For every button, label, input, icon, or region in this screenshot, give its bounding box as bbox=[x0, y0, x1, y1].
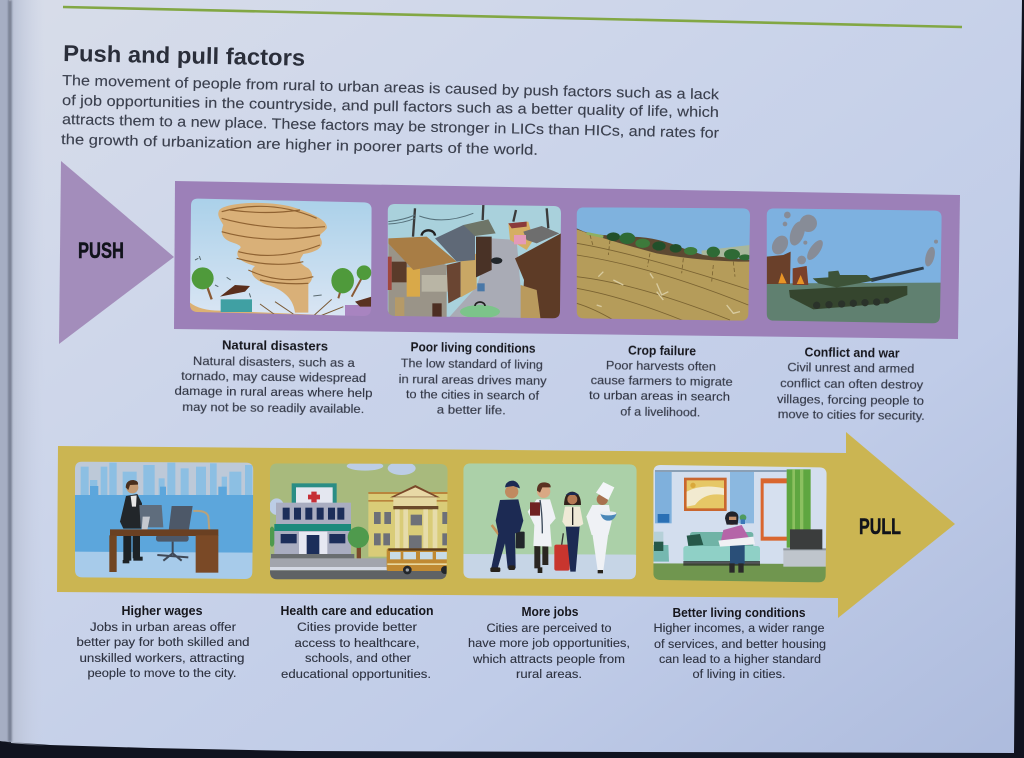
illustration: crop failure bbox=[573, 205, 753, 323]
caption: better living conditions: Higher incomes, a wider range bbox=[654, 621, 825, 635]
caption: poor living conditions: to the cities in search of bbox=[406, 387, 540, 403]
caption: more jobs: rural areas. bbox=[516, 667, 582, 681]
caption: better living conditions: of services, and better housing bbox=[654, 637, 826, 651]
illustration: poor living conditions bbox=[385, 202, 563, 322]
caption: conflict and war: conflict can often destroy bbox=[780, 376, 924, 392]
caption: higher wages: Higher wages bbox=[122, 604, 203, 618]
green rule bbox=[63, 7, 962, 27]
illustration: conflict and war bbox=[763, 205, 945, 327]
push arrow head bbox=[59, 161, 174, 344]
illustration: living room bbox=[650, 462, 830, 585]
caption: crop failure: Crop failure bbox=[628, 344, 696, 358]
push band bbox=[174, 181, 960, 339]
caption: poor living conditions bbox=[398, 340, 548, 418]
caption: crop failure: of a livelihood. bbox=[620, 404, 700, 419]
illustration: workers bbox=[460, 460, 640, 582]
caption: higher wages: people to move to the city. bbox=[88, 666, 236, 680]
caption: conflict and war: move to cities for security. bbox=[778, 407, 925, 423]
title: Push and pull factors bbox=[63, 40, 305, 71]
caption: conflict and war bbox=[777, 345, 926, 423]
caption: more jobs: have more job opportunities, bbox=[468, 636, 630, 650]
caption: better living conditions bbox=[654, 606, 826, 681]
caption: conflict and war: Conflict and war bbox=[804, 345, 900, 361]
caption: poor living conditions: The low standard of living bbox=[401, 356, 543, 372]
caption: health care and education: Cities provide better bbox=[297, 620, 417, 634]
illustration: office bbox=[73, 460, 255, 582]
caption: higher wages bbox=[76, 604, 250, 680]
caption: natural disasters: Natural disasters, such as a bbox=[193, 354, 355, 370]
caption: higher wages: unskilled workers, attracting bbox=[80, 651, 244, 665]
illustration: hospital and school bbox=[267, 460, 450, 582]
chef bbox=[586, 482, 617, 573]
caption: more jobs bbox=[468, 605, 630, 681]
illustration: tornado bbox=[187, 195, 377, 320]
worker bbox=[490, 481, 525, 572]
caption: higher wages: better pay for both skilled and bbox=[76, 635, 250, 649]
caption: natural disasters: tornado, may cause widespread bbox=[181, 369, 366, 385]
caption: poor living conditions: in rural areas drives many bbox=[399, 372, 548, 388]
caption: health care and education bbox=[280, 604, 434, 681]
pull label: PULL bbox=[859, 514, 901, 539]
caption: better living conditions: Better living conditions bbox=[672, 606, 806, 620]
pull arrow band bbox=[57, 432, 955, 618]
push label: PUSH bbox=[78, 238, 124, 263]
caption: crop failure: Poor harvests often bbox=[606, 358, 716, 374]
caption: more jobs: which attracts people from bbox=[472, 652, 625, 666]
intro text: The movement of people from rural to urban areas is caused by push factors such as a lack bbox=[62, 73, 720, 103]
caption: crop failure bbox=[589, 343, 733, 420]
caption: health care and education: access to healthcare, bbox=[294, 636, 420, 650]
caption: crop failure: cause farmers to migrate bbox=[591, 373, 733, 389]
caption: natural disasters bbox=[174, 338, 373, 416]
caption: poor living conditions: Poor living conditions bbox=[410, 340, 536, 356]
caption: natural disasters: damage in rural areas where help bbox=[174, 384, 373, 400]
caption: better living conditions: can lead to a higher standard bbox=[659, 652, 821, 666]
caption: more jobs: More jobs bbox=[522, 605, 579, 619]
caption: natural disasters: may not be so readily available. bbox=[182, 400, 364, 416]
flight attendant bbox=[554, 492, 583, 572]
caption: better living conditions: of living in cities. bbox=[692, 667, 786, 681]
caption: health care and education: schools, and other bbox=[305, 651, 411, 665]
caption: conflict and war: villages, forcing people to bbox=[777, 392, 924, 408]
caption: poor living conditions: a better life. bbox=[437, 403, 506, 417]
caption: more jobs: Cities are perceived to bbox=[486, 621, 612, 635]
intro text: attracts them to a new place. These factors may be stronger in LICs than HICs, and rates for bbox=[62, 112, 719, 142]
caption: conflict and war: Civil unrest and armed bbox=[787, 360, 914, 376]
intro text: the growth of urbanization are higher in poorer parts of the world. bbox=[61, 132, 538, 159]
doctor bbox=[528, 482, 556, 573]
caption: health care and education: educational opportunities. bbox=[281, 667, 431, 681]
caption: natural disasters: Natural disasters bbox=[222, 338, 328, 354]
intro text bbox=[61, 73, 720, 159]
caption: health care and education: Health care and education bbox=[280, 604, 434, 618]
caption: higher wages: Jobs in urban areas offer bbox=[90, 620, 236, 634]
caption: crop failure: to urban areas in search bbox=[589, 388, 730, 404]
intro text: of job opportunities in the countryside, and pull factors such as a better quality of life, which bbox=[62, 93, 719, 121]
